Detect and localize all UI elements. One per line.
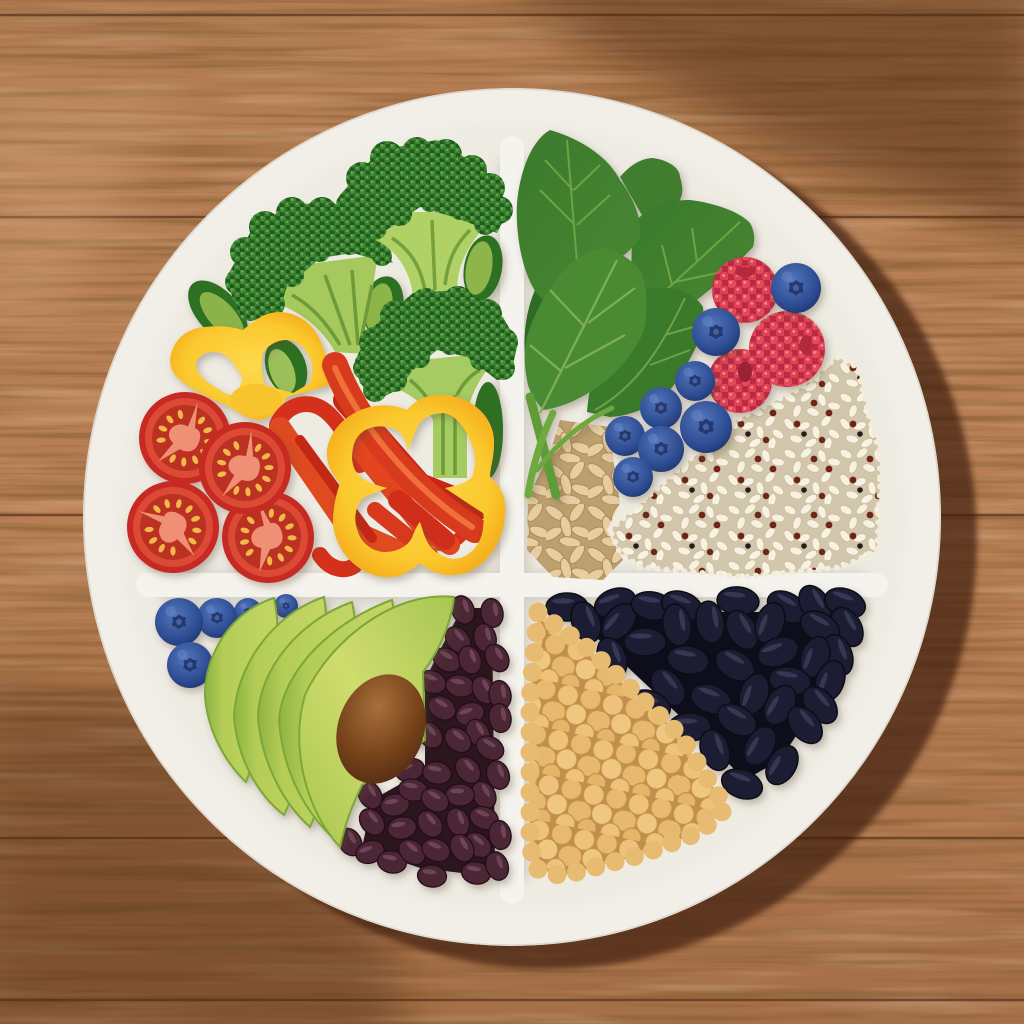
yellow pepper ring back: [170, 312, 331, 420]
avocado pit: [321, 662, 441, 796]
section: avocado and kidney beans: [155, 593, 514, 888]
cucumber slices: [177, 232, 507, 478]
raspberries: [708, 257, 825, 413]
blueberries left: [155, 594, 298, 688]
farro grains: [527, 420, 623, 580]
plate: [83, 88, 941, 946]
quinoa: [610, 357, 880, 577]
blueberries: [605, 263, 821, 497]
section: greens, berries and grains: [517, 130, 880, 580]
tomato slices: [114, 382, 327, 596]
spinach leaves: [517, 130, 754, 495]
black beans: [546, 580, 870, 804]
plate shadow: [119, 111, 977, 969]
yellow pepper ring front: [327, 395, 505, 577]
red pepper strips: [277, 365, 478, 569]
broccoli left: [225, 197, 393, 354]
avocado slices: [205, 596, 454, 847]
lentils: [530, 612, 726, 876]
section: vegetables: [114, 137, 518, 596]
broccoli top: [336, 137, 513, 296]
kidney beans: [333, 593, 514, 888]
broccoli front: [353, 286, 518, 478]
section: lentils and black beans: [530, 580, 870, 876]
plate dividers: [148, 148, 876, 892]
